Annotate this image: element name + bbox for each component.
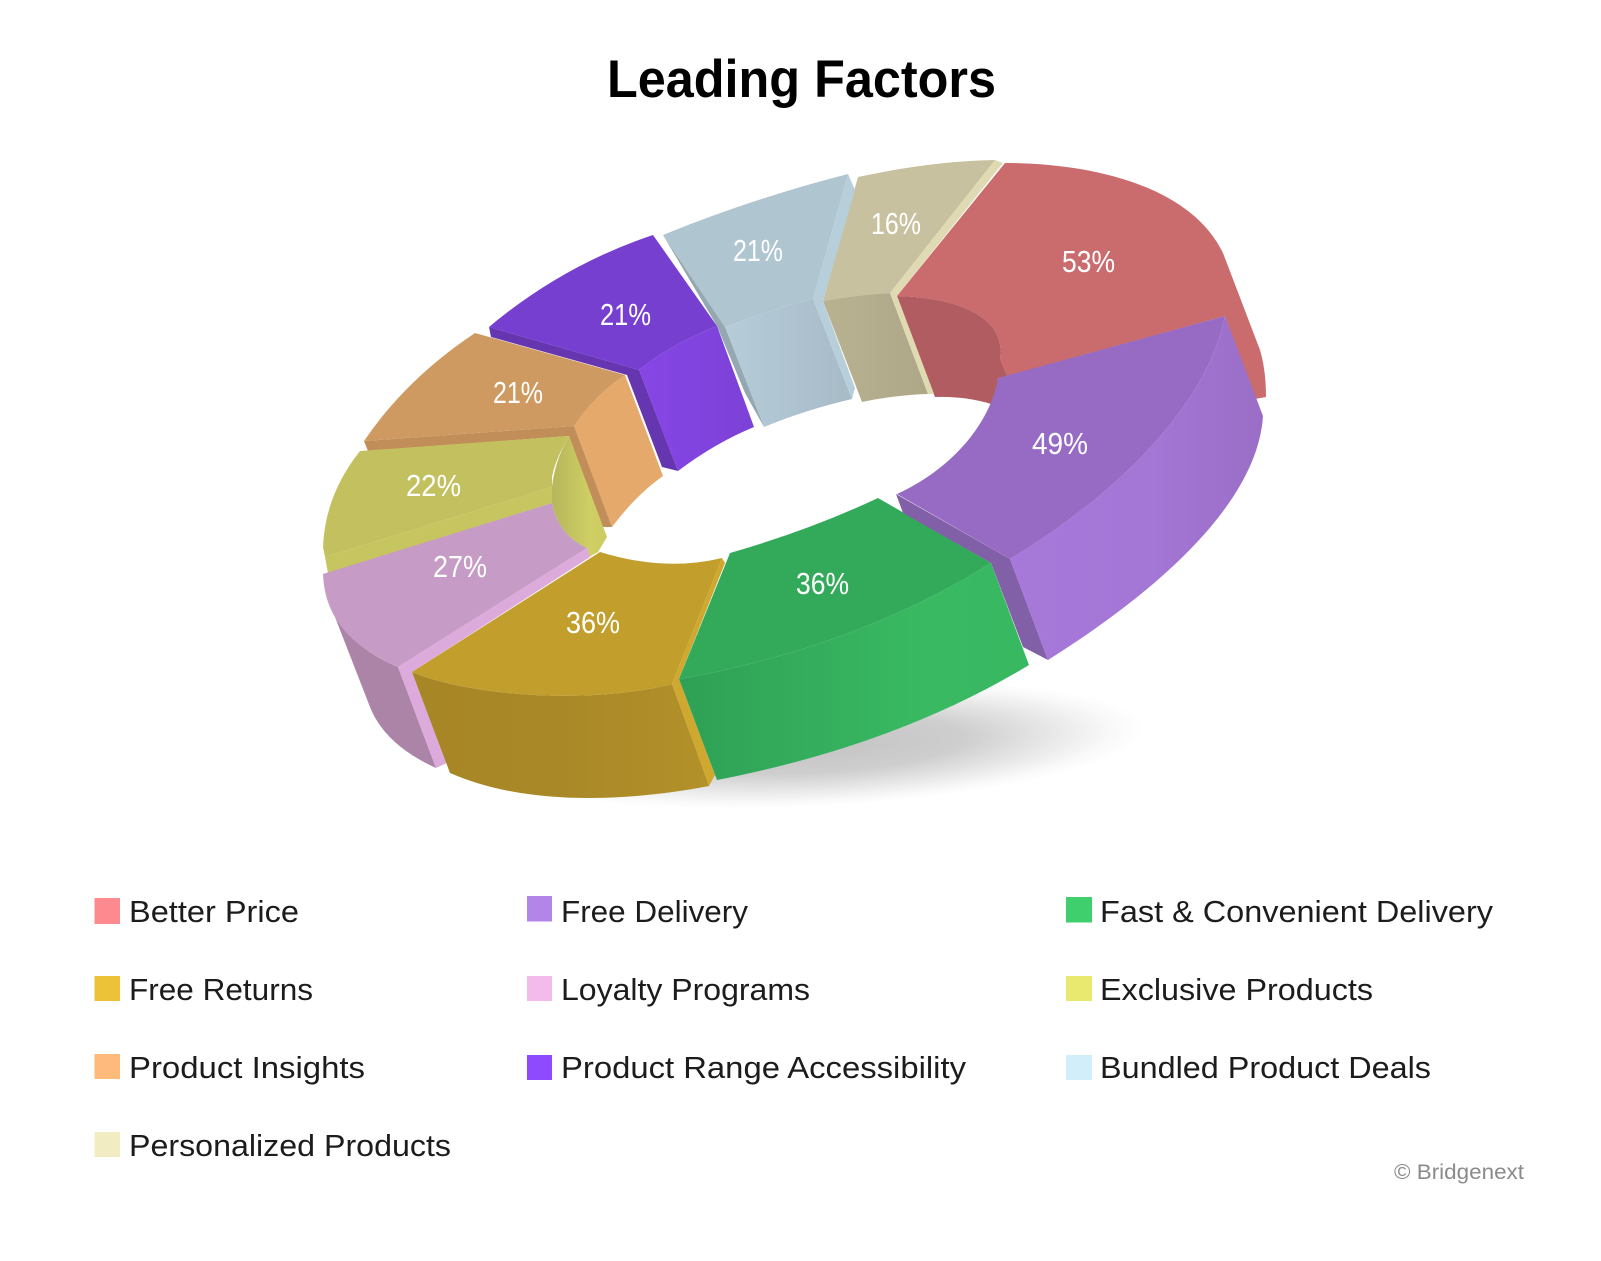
legend item: Personalized Products: Personalized Products — [129, 1128, 451, 1163]
value: 36% gold: 36% — [566, 605, 620, 640]
value: 22%: 22% — [406, 468, 461, 503]
legend item: Product Insights: Product Insights — [129, 1050, 365, 1085]
value: 21% blue: 21% — [733, 233, 783, 268]
percentage labels — [406, 206, 1115, 640]
legend item: Fast & Convenient Delivery: Fast & Convenient Delivery — [1100, 894, 1494, 929]
slice: Free Returns — [412, 552, 725, 798]
legend — [94, 894, 1494, 1163]
value: 16%: 16% — [871, 206, 921, 241]
legend item: Free Returns: Free Returns — [129, 972, 313, 1007]
value: 21% violet: 21% — [600, 297, 651, 332]
slice: Exclusive Products — [323, 436, 607, 573]
legend item: Exclusive Products: Exclusive Products — [1100, 972, 1373, 1007]
value: 36% green: 36% — [796, 566, 849, 601]
slice: Product Range Accessibility — [489, 235, 754, 471]
chart shadow — [482, 666, 1148, 824]
legend item: Free Delivery: Free Delivery — [561, 894, 748, 929]
slice: Product Insights — [364, 333, 663, 527]
slice: Personalized Products — [823, 160, 1003, 402]
legend item: Loyalty Programs: Loyalty Programs — [561, 972, 810, 1007]
value: 21% orange: 21% — [493, 375, 543, 410]
legend item: Product Range Accessibility: Product Range Accessibility — [561, 1050, 967, 1085]
slice: Loyalty Programs — [323, 503, 590, 768]
3D donut chart — [323, 160, 1266, 824]
value: 27%: 27% — [433, 549, 487, 584]
slice: Free Delivery — [896, 316, 1263, 660]
legend item: Bundled Product Deals: Bundled Product Deals — [1100, 1050, 1431, 1085]
slice: Bundled Product Deals — [663, 174, 855, 427]
slice: Better Price — [897, 163, 1266, 404]
title: Leading Factors — [607, 50, 996, 109]
value: 49%: 49% — [1032, 426, 1088, 461]
slice: Fast & Convenient Delivery — [679, 498, 1029, 780]
legend item: Better Price: Better Price — [129, 894, 299, 929]
value: 53%: 53% — [1062, 244, 1115, 279]
copyright: © Bridgenext — [1394, 1161, 1524, 1184]
